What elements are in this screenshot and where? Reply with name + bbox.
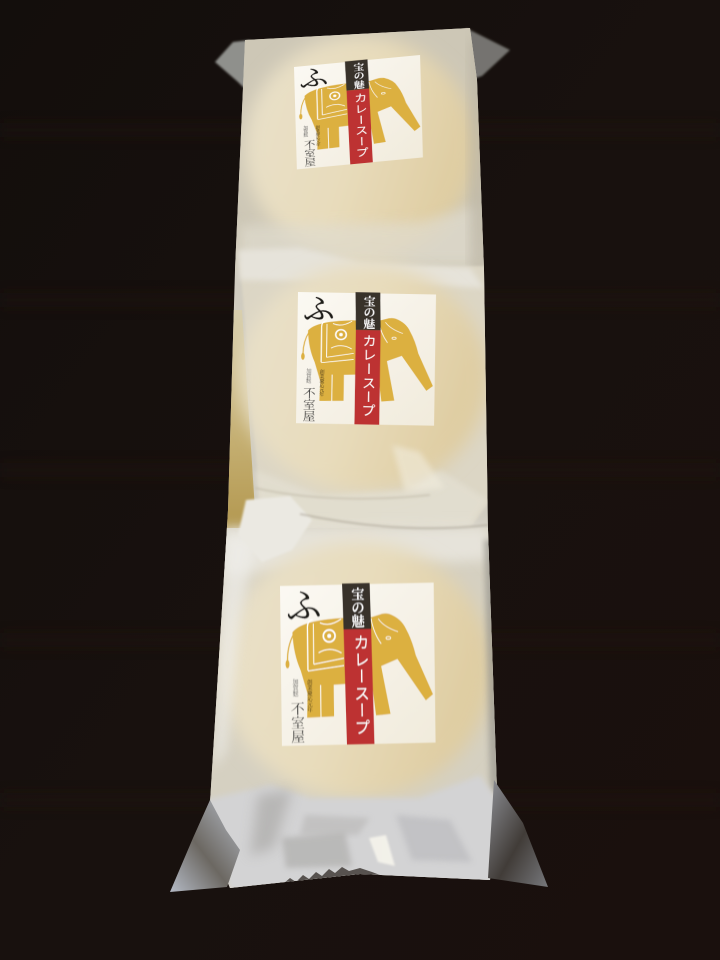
founding note 1: 創業慶応元年 xyxy=(314,123,322,147)
base film xyxy=(210,28,497,888)
bag corner: bottom right silver xyxy=(488,780,548,887)
red band 3 xyxy=(344,629,375,745)
logo ふ 3: ふ xyxy=(286,586,322,627)
right shade 1 xyxy=(470,40,486,270)
wrapper 3 xyxy=(200,528,510,898)
band title 3: 宝の魅 xyxy=(349,586,365,629)
crimped seal between packs xyxy=(238,488,488,562)
elephant illustration 3 xyxy=(285,612,433,718)
lower wrapper of pack 3 xyxy=(205,775,498,890)
wrapper 1 xyxy=(235,20,485,270)
label 2 xyxy=(296,291,436,426)
label paper 1 xyxy=(294,55,423,169)
yellow inner card edge xyxy=(226,310,256,532)
product name 1: カレースープ xyxy=(352,92,369,159)
fu disc 1 xyxy=(244,36,476,260)
founding note 2: 創業慶応元年 xyxy=(319,369,325,398)
upper seal of pack 3 xyxy=(222,526,490,575)
maker small 2: 加賀麩 xyxy=(305,368,311,385)
lower fold of wrapper 1 xyxy=(240,205,482,265)
label 1 xyxy=(294,54,423,169)
label 3 xyxy=(280,582,436,746)
fold shadows xyxy=(250,790,472,868)
elephant illustration 2 xyxy=(300,317,434,403)
label paper 2 xyxy=(296,292,436,426)
red band 1 xyxy=(347,89,373,164)
bag corner: top right xyxy=(466,28,510,80)
maker small 1: 加賀麩 xyxy=(302,124,309,139)
product name 3: カレースープ xyxy=(351,634,369,736)
left film shine xyxy=(213,537,252,762)
label paper 3 xyxy=(280,583,436,746)
band title 2: 宝の魅 xyxy=(362,295,376,330)
serrated seal shadow xyxy=(286,867,380,882)
bag corner: top left xyxy=(215,40,250,92)
photo: three packaged curry soup fu in a clear bag on a dark table xyxy=(170,27,548,892)
band title 1: 宝の魅 xyxy=(351,61,365,90)
package 1 xyxy=(235,20,486,270)
maker small 3: 加賀麩 xyxy=(291,678,298,698)
founding note 3: 創業慶応元年 xyxy=(306,678,313,714)
logo ふ 1: ふ xyxy=(299,65,329,93)
elephant illustration 1 xyxy=(298,74,421,151)
fu disc 2 xyxy=(240,264,488,492)
package 3 xyxy=(200,526,510,898)
top crease of wrapper 2 xyxy=(238,248,484,288)
right film shade xyxy=(481,538,497,793)
red band 2 xyxy=(354,330,381,425)
maker name 3: 不室屋 xyxy=(288,701,305,744)
lower folds of wrapper 2 xyxy=(252,471,482,522)
crease gleam xyxy=(392,445,438,490)
clear outer bag with wrapped packages xyxy=(210,28,497,888)
wrapper 2 xyxy=(242,266,488,504)
package 2 xyxy=(226,248,490,532)
maker name 2: 不室屋 xyxy=(301,387,316,422)
black band 2 xyxy=(355,292,381,330)
black band 1 xyxy=(345,59,369,91)
fu disc 3 xyxy=(220,542,492,798)
black band 3 xyxy=(342,583,371,630)
logo ふ 2: ふ xyxy=(303,293,335,326)
product name 2: カレースープ xyxy=(359,334,376,418)
bag corner: bottom left silver xyxy=(170,800,240,892)
maker name 1: 不室屋 xyxy=(301,139,315,168)
